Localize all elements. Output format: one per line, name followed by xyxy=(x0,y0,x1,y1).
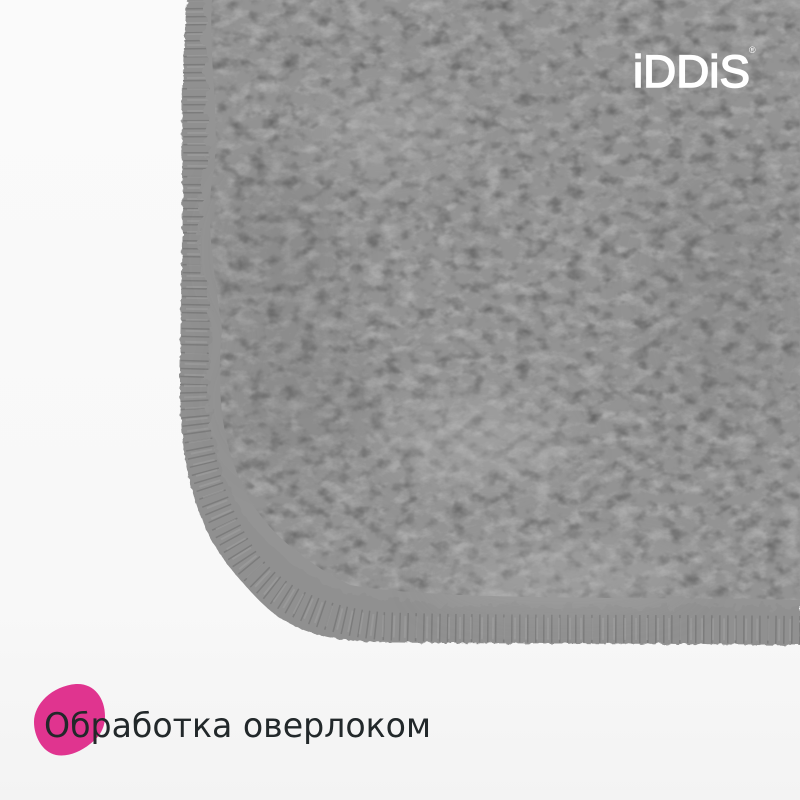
rug xyxy=(180,0,800,645)
overlock stitching xyxy=(194,0,800,630)
caption accent blob xyxy=(34,684,105,755)
rug overlock border xyxy=(180,0,800,645)
pile texture xyxy=(210,0,800,600)
logo: IDDIS: iDDiS xyxy=(633,46,750,97)
rug pile xyxy=(198,0,800,608)
caption: Обработка оверлоком xyxy=(44,706,431,746)
registered mark: ® xyxy=(749,45,756,55)
light and dark patches xyxy=(236,94,744,598)
